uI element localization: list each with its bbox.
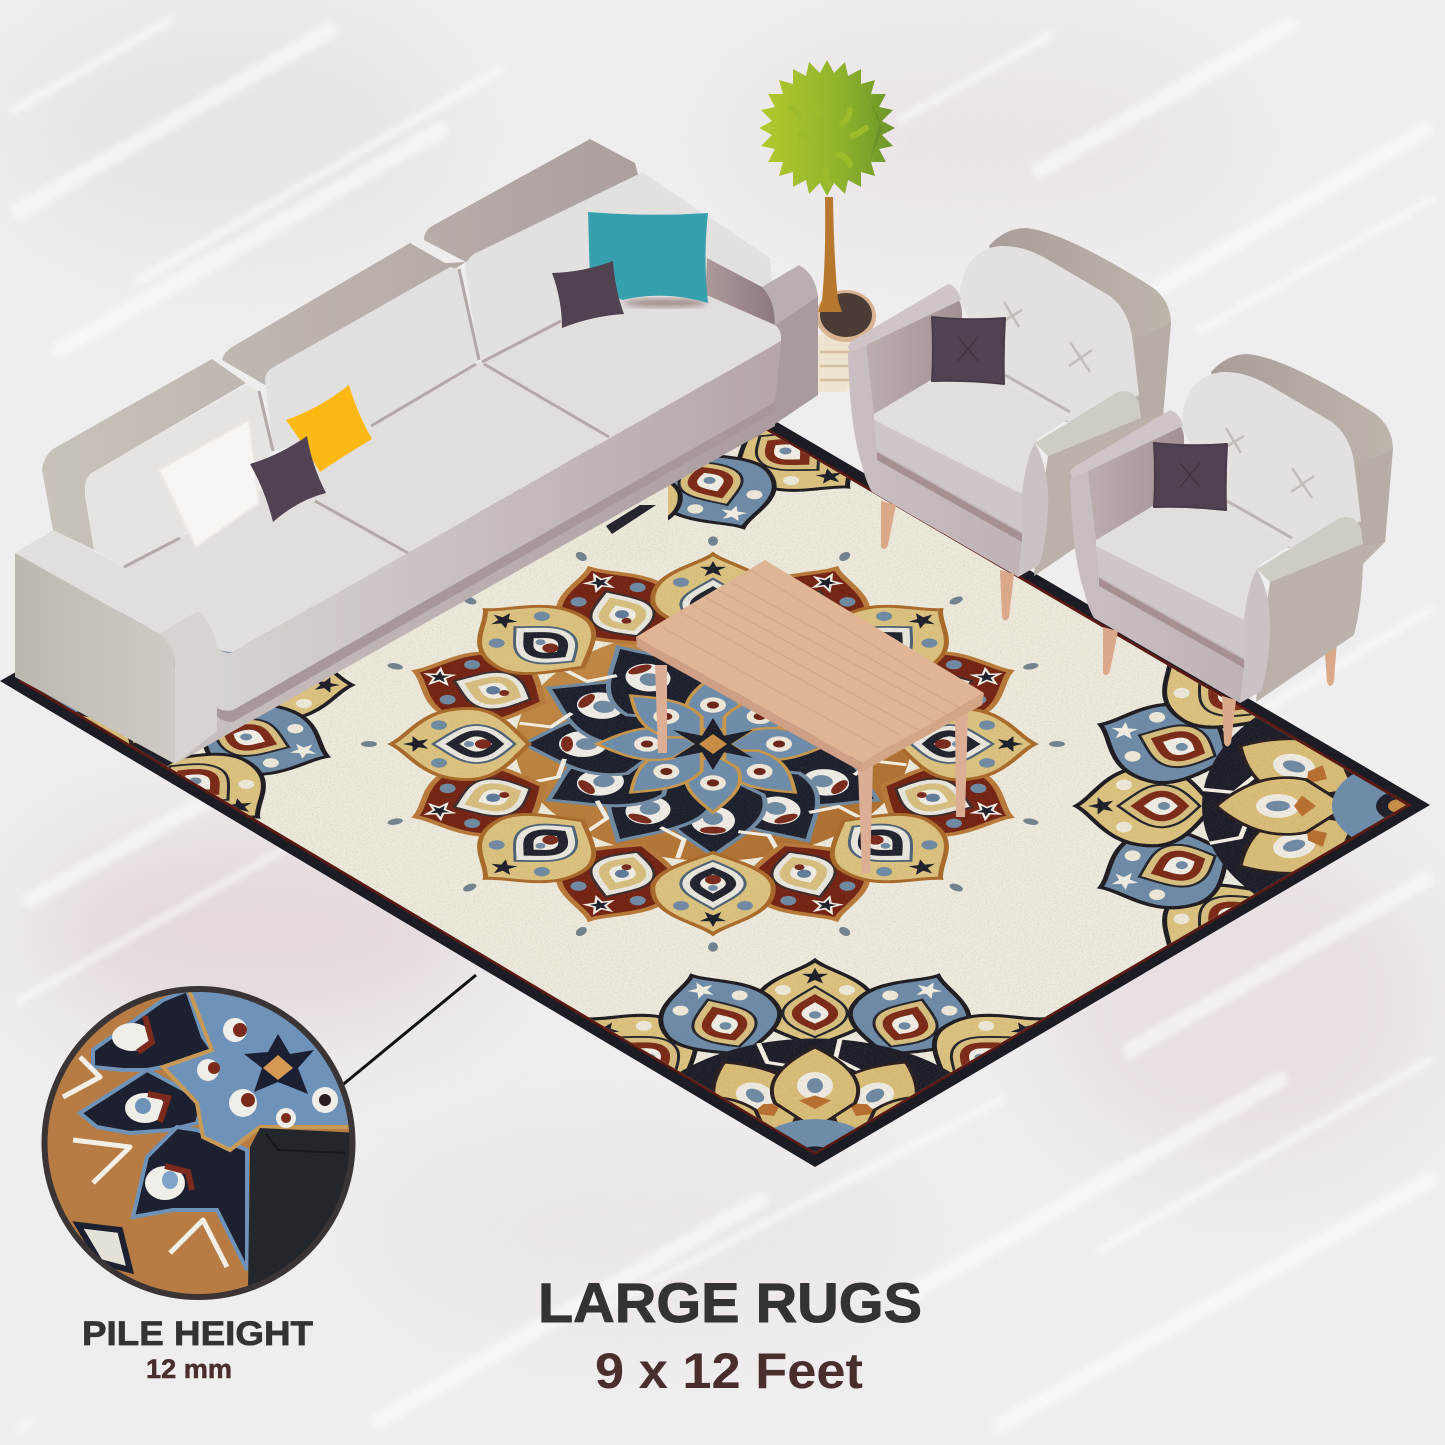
close-up white motifs [112,1016,338,1200]
sofa back rests [42,139,642,550]
close-up blue star [163,985,360,1150]
subtitle: 9 x 12 Feet [595,1343,863,1399]
close-up bottom-left motif [78,1225,130,1270]
plant [759,60,895,392]
label: 12 mm: 12 mm [146,1354,232,1384]
armchair 2 [1070,354,1393,746]
armchair 1 [848,228,1171,620]
sofa seams [124,269,609,567]
pillow: dark left [250,436,326,522]
plant pot [816,290,876,392]
sofa back cushions [85,172,775,567]
close-up white hooks [63,1057,227,1267]
coffee table [636,560,984,873]
title: LARGE RUGS [538,1271,922,1334]
table top [636,560,984,763]
pillow: yellow [286,385,372,472]
plant trunk [818,197,842,312]
pillow: white [159,420,259,547]
sofa [15,139,818,764]
label: pile height: PILE HEIGHT [82,1315,313,1353]
rug [0,382,1430,1167]
rug backing corner [248,1128,350,1286]
callout: pile height close-up [40,985,360,1305]
close-up centre flower [244,1034,314,1094]
sofa right arm [762,265,818,424]
connector line [340,975,476,1087]
plant crown [759,60,895,196]
pillow: teal [588,212,708,307]
sofa base [175,341,781,764]
pillow: dark right [552,261,624,328]
central medallion [361,536,1065,952]
sofa seat [15,285,781,652]
table legs [655,665,968,873]
close-up navy lobes [80,990,247,1270]
sofa left arm [15,553,217,764]
